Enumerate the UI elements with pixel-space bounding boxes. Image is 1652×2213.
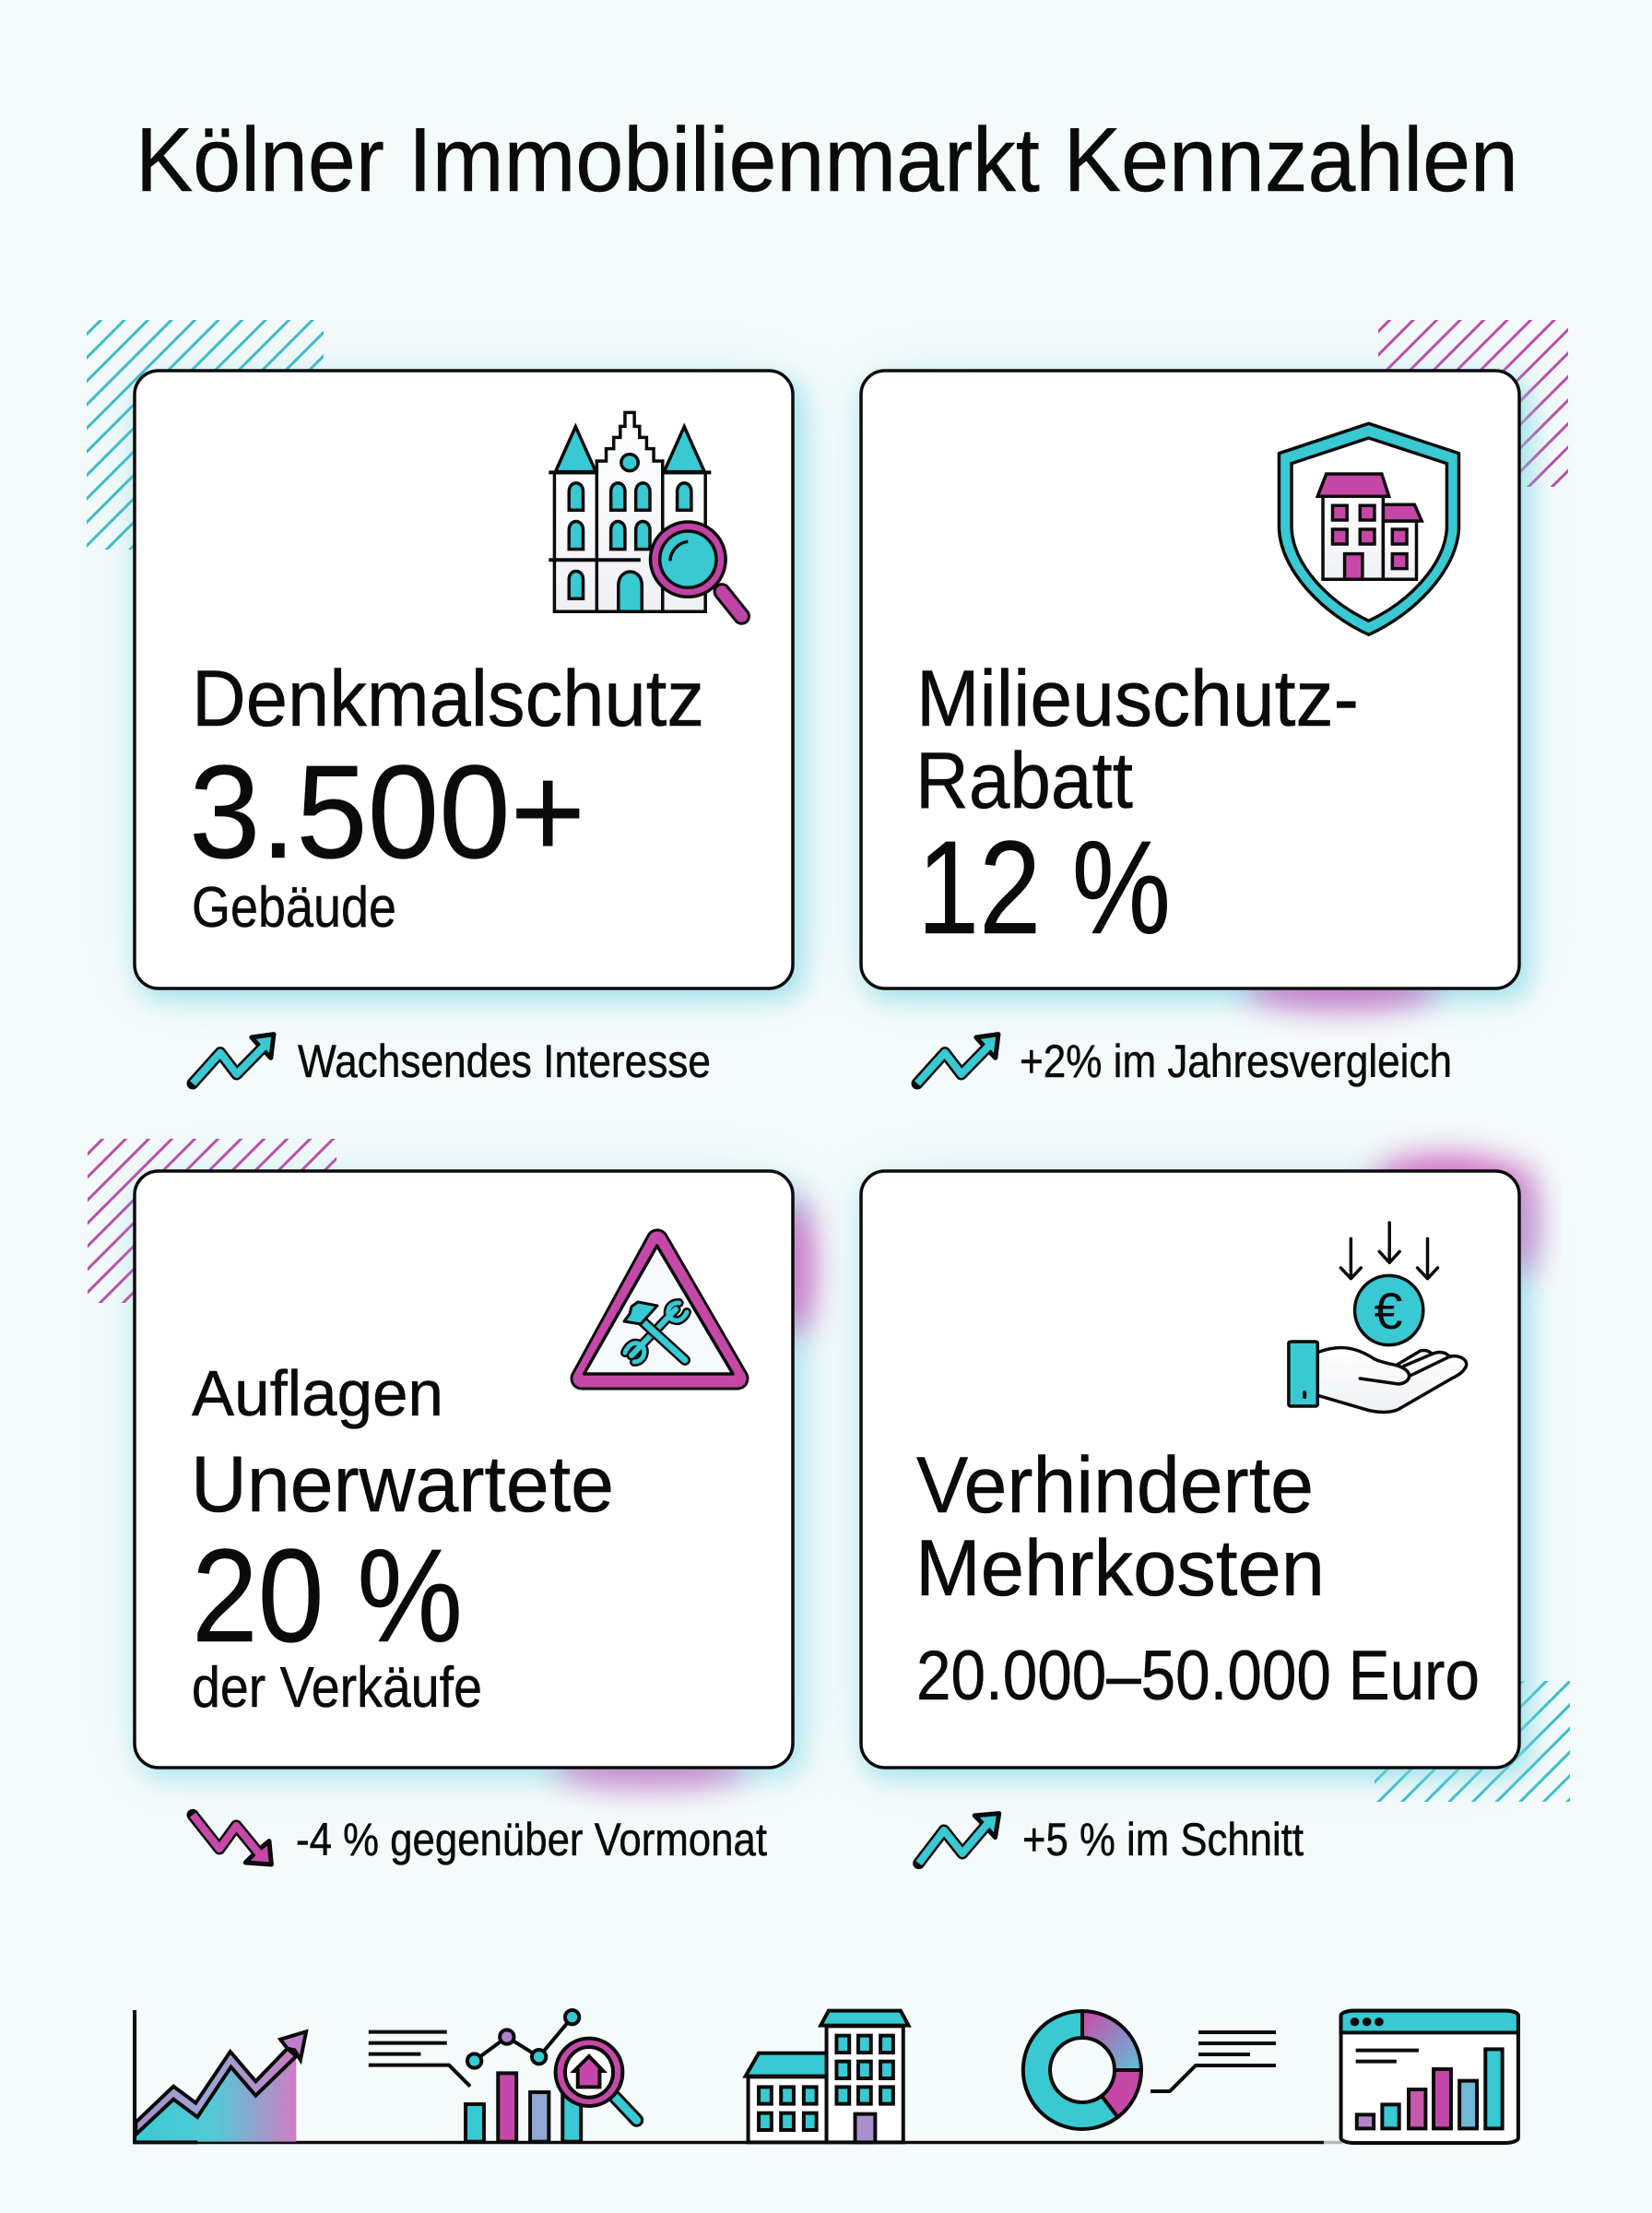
unit: Gebäude (192, 876, 396, 940)
icon: shield with houses (1279, 423, 1459, 634)
panel: Unerwartete Auflagen (135, 1171, 793, 1768)
icon: warning triangle with tools (582, 1240, 738, 1379)
icon: falling arrow (193, 1815, 271, 1864)
label: +5 % im Schnitt (1022, 1814, 1304, 1865)
heading: Denkmalschutz (192, 655, 704, 743)
icon: rising arrow (917, 1035, 998, 1083)
heading: Milieuschutz- (916, 655, 1359, 743)
icon: dashboard window with bars (1341, 2011, 1518, 2143)
euro sign: € (1374, 1282, 1403, 1340)
stripe patch: teal top left (87, 320, 324, 550)
trend: Wachsendes Interesse (193, 1035, 711, 1087)
icon: hand with euro coin (1289, 1223, 1467, 1412)
stripe patch: magenta top right (1378, 320, 1568, 487)
wide soft glow (134, 373, 1521, 1770)
stripe patch: magenta middle left (88, 1139, 336, 1303)
panel: Denkmalschutz (135, 371, 793, 988)
heading: Unerwartete (191, 1440, 614, 1529)
panel: Milieuschutz-Rabatt (861, 371, 1519, 988)
icon: rising arrow (193, 1035, 274, 1083)
icon: historic building with magnifier (549, 412, 741, 616)
value: 20.000–50.000 Euro (916, 1637, 1480, 1715)
label: -4 % gegenüber Vormonat (296, 1814, 767, 1865)
label: Wachsendes Interesse (298, 1035, 711, 1087)
value: 12 % (917, 813, 1171, 962)
value: 3.500+ (189, 738, 585, 886)
heading small: Auflagen (192, 1357, 443, 1429)
trend: +5 % im Schnitt (919, 1814, 1304, 1865)
card glows (138, 380, 1540, 1790)
heading line 2: Rabatt (915, 737, 1133, 825)
panel: Verhinderte Mehrkosten (861, 1171, 1519, 1768)
chart: donut with callout lines (1023, 2011, 1276, 2129)
title: Kölner Immobilienmarkt Kennzahlen (136, 109, 1518, 210)
trend: -4 % gegenüber Vormonat (193, 1814, 767, 1865)
icon: apartment buildings (746, 2011, 909, 2142)
trend: +2% im Jahresvergleich (917, 1035, 1452, 1087)
unit: der Verkäufe (192, 1656, 482, 1720)
label: +2% im Jahresvergleich (1020, 1035, 1452, 1087)
value: 20 % (192, 1521, 463, 1670)
chart: bars, line and magnifier (369, 2010, 637, 2142)
heading: Verhinderte (916, 1441, 1314, 1530)
icon: rising arrow (919, 1814, 999, 1864)
heading line 2: Mehrkosten (915, 1524, 1325, 1613)
baseline (135, 2141, 1342, 2144)
chart: area with rising arrow (135, 2010, 306, 2142)
stripe patch: teal bottom right (1375, 1681, 1570, 1802)
